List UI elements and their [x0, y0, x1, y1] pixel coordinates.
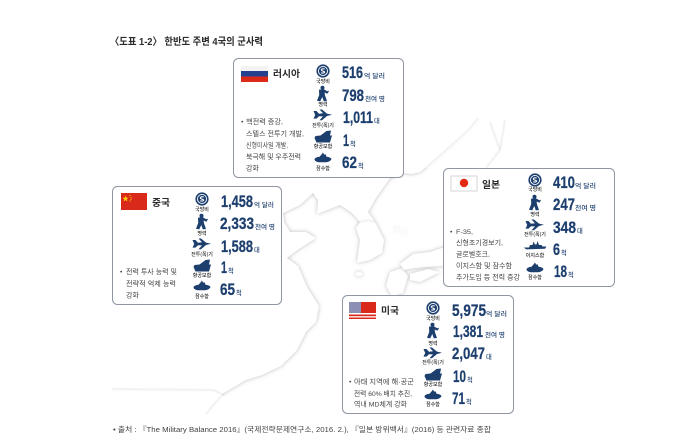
stat: submarines: 65 [220, 281, 235, 299]
icon: fighter: 전투(폭)기 [422, 359, 444, 366]
stat: aegis ships: 척 [561, 248, 567, 257]
icon: submarine [194, 280, 210, 300]
icon: fighter: 전투(폭)기 [524, 231, 546, 238]
icon: troops: 병력 [318, 101, 328, 108]
stat: budget [553, 174, 596, 192]
icon: carrier [424, 368, 443, 388]
text: Russia description: 신형미사일 개발, [246, 140, 288, 150]
text: Russia description: • [241, 119, 244, 126]
icon: submarine: 잠수함 [316, 165, 330, 172]
stat: submarines: 18 [554, 263, 567, 281]
icon: defense budget: 국방비 [195, 206, 209, 213]
stat: troops: 798 [342, 87, 364, 105]
source note: • 출처 : 『The Military Balance 2016』(국제전략문제연구소, 2016. 2.), 『일본 방위백서』(2016) 등 관련자료 종합 [113, 424, 491, 434]
map: mainland China, Korea and Russian Far East [0, 0, 540, 448]
stat: submarines: 척 [568, 270, 574, 279]
map: Jeju [356, 272, 362, 276]
map: Honshu [400, 200, 480, 270]
stat: carriers: 척 [467, 375, 473, 384]
icon: submarine [314, 152, 332, 172]
stat: fighters: 348 [553, 219, 576, 237]
stat: aegis ships [553, 241, 567, 259]
text: China description: 전략적 억제 능력 [126, 279, 176, 288]
text: Japan description: 이지스함 및 잠수함 [456, 261, 512, 270]
text: US description: • [349, 379, 352, 386]
icon: carrier: 항공모함 [193, 272, 212, 279]
panel: Japan [444, 168, 614, 286]
map: Ulleung islands [396, 228, 406, 233]
icon: defense budget [316, 64, 330, 85]
stat: troops: 247 [553, 196, 575, 214]
stat: troops: 천여 명 [255, 222, 275, 231]
icon: fighter [191, 238, 213, 258]
text: China description [120, 267, 177, 300]
icon: carrier: 항공모함 [314, 143, 333, 150]
stat: carriers: 척 [350, 139, 356, 148]
icon: fighter [312, 110, 334, 129]
heading: Japan: 일본 [482, 179, 500, 191]
map: faint borders [112, 120, 505, 414]
stat: budget: 410 [553, 174, 575, 192]
text: US description: 전력 60% 배치 추진, [354, 389, 412, 398]
panel: United States [342, 296, 514, 414]
text: Japan description: • [450, 229, 453, 236]
stat: troops [553, 196, 596, 214]
text: China description: • [120, 269, 123, 276]
stat: budget [342, 64, 385, 82]
stat: fighters: 1,011 [343, 109, 373, 127]
icon: fighter [422, 348, 444, 366]
stat: fighters: 1,588 [221, 238, 253, 256]
stat: carriers: 1 [343, 132, 349, 150]
stat: fighters: 2,047 [452, 345, 485, 363]
stat: troops [342, 87, 385, 105]
icon: defense budget: 국방비 [426, 315, 440, 322]
icon: defense budget: 국방비 [316, 78, 330, 85]
panel: Russia [234, 58, 404, 178]
text: Japan description: 글로벌호크, [456, 250, 490, 258]
text: Russia description: 스텔스 전투기 개발, [246, 129, 304, 138]
stat: budget: 억 달러 [486, 309, 507, 318]
stat: fighters: 대 [374, 116, 380, 125]
icon: troops: 병력 [428, 340, 438, 347]
icon: troops: 병력 [197, 230, 207, 237]
stat: troops: 1,381 [453, 323, 483, 341]
text: Japan description: 추가도입 등 전력 증강 [456, 272, 520, 282]
text: Russia description: 북극해 및 우주전력 [246, 152, 301, 161]
icon: fighter [524, 220, 546, 238]
flag: Russia [241, 66, 268, 82]
stat: carriers: 1 [221, 259, 227, 277]
icon: troops [427, 323, 439, 347]
stat: carriers: 10 [453, 368, 466, 386]
icon: troops [529, 195, 541, 218]
stat: budget: 억 달러 [364, 71, 385, 80]
stat: fighters: 대 [486, 352, 492, 361]
icon: defense budget: 국방비 [528, 186, 542, 193]
text: US description [349, 377, 414, 408]
stat: troops: 천여 명 [575, 203, 596, 212]
stat: fighters: 대 [577, 226, 583, 235]
text: China description: 전력 투사 능력 및 [126, 267, 177, 276]
icon: submarine: 잠수함 [528, 274, 542, 281]
heading: Russia: 러시아 [273, 69, 300, 80]
stat: fighters: 대 [254, 245, 260, 254]
icon: submarine: 잠수함 [195, 293, 209, 300]
stat: budget: 5,975 [452, 302, 486, 320]
icon: carrier: 항공모함 [424, 381, 443, 388]
flag: Japan [451, 176, 477, 191]
icon: troops [196, 214, 208, 237]
map: Shikoku [410, 269, 440, 282]
heading: China: 중국 [152, 198, 170, 209]
text: Japan description [450, 229, 520, 282]
icon: submarine: 잠수함 [426, 401, 440, 408]
map: Kyushu [386, 268, 408, 296]
title: 〈도표 1-2〉 한반도 주변 4국의 군사력 [110, 35, 263, 48]
stat: aegis ships: 6 [553, 241, 560, 259]
icon: carrier [193, 260, 212, 279]
stat: budget: 억 달러 [254, 200, 274, 209]
stat: budget: 516 [342, 64, 363, 82]
icon: fighter: 전투(폭)기 [312, 122, 334, 129]
text: Japan description: F-35, [456, 229, 473, 236]
icon: submarine [424, 390, 442, 408]
icon: fighter: 전투(폭)기 [191, 251, 213, 258]
icon: defense budget [426, 301, 440, 322]
stat: carriers: 척 [228, 266, 234, 275]
icon: carrier [314, 130, 333, 150]
stat: budget: 억 달러 [575, 181, 596, 190]
icon: submarine [526, 262, 544, 281]
icon: aegis ship: 이지스함 [526, 252, 545, 259]
text: US description: 아태 지역에 해·공군 [354, 377, 414, 386]
heading: United States: 미국 [381, 306, 399, 317]
text: Japan description: 신형조기경보기, [456, 238, 503, 247]
text: Russia description: 강화 [246, 164, 260, 172]
stat: submarines: 척 [236, 288, 242, 297]
icon: troops [317, 86, 329, 108]
icon: troops: 병력 [530, 211, 540, 218]
icon: aegis ship [524, 241, 546, 259]
stat: submarines: 척 [466, 397, 472, 406]
icon: defense budget [195, 192, 209, 213]
stat: troops: 천여 명 [365, 94, 385, 103]
stat: submarines: 척 [358, 161, 364, 170]
stat: budget: 1,458 [221, 193, 253, 211]
stat: submarines: 71 [452, 390, 465, 408]
stat: submarines: 62 [342, 154, 357, 172]
panel: China [112, 186, 282, 304]
text: US description: 역내 MD체계 강화 [354, 400, 408, 408]
text: Russia description [241, 117, 304, 172]
stat: troops: 천여 명 [485, 330, 505, 339]
flag: United States [349, 302, 376, 319]
icon: defense budget [528, 173, 542, 193]
text: China description: 강화 [126, 290, 140, 300]
flag: China [121, 193, 147, 210]
text: Russia description: 핵전력 증강, [246, 117, 283, 126]
stat: troops: 2,333 [220, 215, 254, 233]
